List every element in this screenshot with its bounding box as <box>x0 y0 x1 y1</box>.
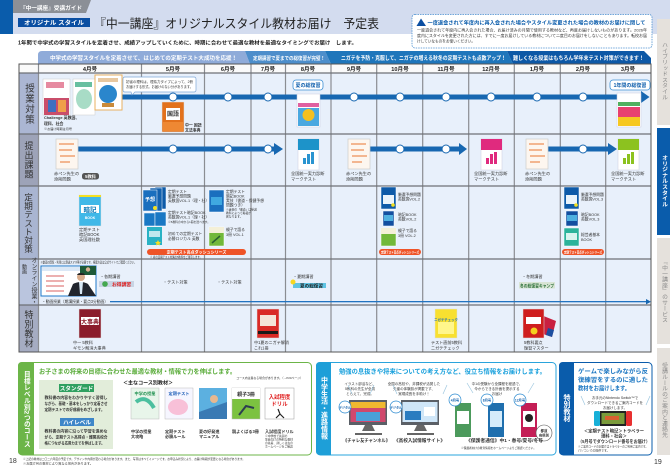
speech bubble <box>123 77 196 95</box>
June test books: 教科によって掲載が <box>226 211 251 215</box>
month headers <box>83 66 636 73</box>
red pen assignments: 赤ペン先生の <box>525 170 550 177</box>
notice box: 度内にスタイルを変更された方には、すでに一度お届けしている教材について二度目のお届けをしないこともあります。転校お届 <box>417 33 647 38</box>
red pen assignments: 添削問題 <box>525 176 543 182</box>
Oct test books <box>379 187 421 255</box>
book group: Challenge April: ※お届け時期は月号 <box>44 126 72 131</box>
special materials: ギモン解消大事典 <box>73 344 106 350</box>
Oct test books: 英数VOL.2 <box>398 216 416 222</box>
book group: Challenge April: Challenge 英数国、 <box>44 115 79 120</box>
month headers: 3月号 <box>621 66 636 73</box>
bubble: summer review <box>293 80 323 127</box>
panel: course levels: の先着、詳しくは左の <box>265 441 293 445</box>
phase banner <box>38 51 651 64</box>
row labels: 動画 <box>21 263 27 275</box>
panel: school life info: 8月号 <box>483 397 492 402</box>
month headers: 11月号 <box>437 66 455 73</box>
panel: course levels: ながら、基礎・基本をしっかり定着させ <box>44 401 108 406</box>
panel: course levels: 教科書の内容に沿って学習を進めな <box>44 428 108 434</box>
June test books <box>209 189 264 246</box>
panel: school life info: イラスト部活など、 <box>344 381 376 386</box>
panel: course levels: 格につながる応用力までを伸ばします。 <box>44 440 104 446</box>
June test books: 3冊 VOL.1 <box>226 233 244 237</box>
guide tab <box>13 0 91 13</box>
month headers: 4月号 <box>83 66 98 73</box>
January test books: 英数VOL.3 <box>581 216 599 222</box>
special materials: これ1冊 <box>254 344 269 350</box>
panel: course levels: 生徒向けの特別な教材 <box>265 438 293 442</box>
row labels: 特別教材 <box>24 309 34 348</box>
panel: course levels: 定期テストでの好成績をめざします。 <box>44 407 104 412</box>
May test books: 定期テスト高点ダッシュシリーズ <box>167 249 226 255</box>
panel: school life info: 中1の受験から全課程を経過で、 <box>472 381 522 386</box>
book: grammar dictionary <box>162 102 202 132</box>
online lessons: 夏の総復習 <box>300 282 323 290</box>
panel: special material: お手元のNintendo Switch™で <box>592 395 639 400</box>
panel: course levels: 親子3冊 <box>237 391 255 398</box>
June test books: 問題つき） <box>226 202 245 208</box>
speech bubble: 初省の理科は、理系力タイプによって、2冊 <box>126 79 193 84</box>
footnotes: ※お届け月の教材により異なる場合があります。 <box>23 460 93 466</box>
special materials: 5教科要点 <box>524 339 543 345</box>
June test books: 異なります。 <box>226 214 243 218</box>
June test books: ※美術の「書道」は受講 <box>226 208 257 212</box>
panel: course levels <box>18 362 312 455</box>
month headers: 12月号 <box>482 66 500 73</box>
book: grammar dictionary: 国語 <box>167 111 179 118</box>
May test books: 厳選予想問題 <box>168 194 191 198</box>
speech bubble: お届けする形式。お届けのない分があります。 <box>126 84 193 89</box>
Oct test books: 厳選予想問題 <box>398 192 421 197</box>
panel: school life info: とらえて、完成。 <box>346 391 374 396</box>
guide tab: 『中一講座』受講ガイド <box>20 4 82 12</box>
panel: school life info: デジタル <box>339 404 351 409</box>
January test books: BOOK <box>581 238 592 242</box>
panel: course levels: 夏の好発進 <box>199 428 219 434</box>
panel: school life info: お届け <box>492 391 503 396</box>
month headers: 7月号 <box>261 66 276 73</box>
footnotes: ※上記の教材は二〇二六年度の予定です。デザインや内容が変わる場合があります。また、写真はすべてイメージです。お申込み状況により、お届け時期が変更になる場合があります。 <box>23 456 245 461</box>
panel: special material: ダウンロードできるご案内コードを <box>587 400 643 405</box>
June test books: 暗記BOOK <box>226 194 245 198</box>
bubble: year review: 1年間の総復習 <box>614 82 646 89</box>
panel: special material: ゲームで楽しみながら反 <box>578 368 648 376</box>
month headers: 1月号 <box>530 66 545 73</box>
phase banner: 定期講習で夏までの総復習が完璧！ <box>253 55 325 62</box>
mock test books: マークテスト <box>474 176 499 182</box>
badge: original style: オリジナル スタイル <box>24 19 84 27</box>
panel: school life info: 実現成長を手助け！ <box>398 391 430 396</box>
Oct test books: 親子で語る <box>398 228 417 233</box>
book group: Challenge April <box>43 75 122 131</box>
special materials: 中一 5教科 <box>73 339 93 345</box>
panel: special material: パソコンでの提供です。 <box>578 448 610 452</box>
online lessons: お得講習 <box>112 281 131 288</box>
panel: school life info: 府県別 <box>539 432 550 438</box>
red pen assignments <box>54 139 550 182</box>
panel: special material: 教材をお届けします。 <box>578 384 630 392</box>
red pen assignments: 添削問題 <box>346 176 364 182</box>
panel: course levels: ※中学校で先週の <box>265 434 288 438</box>
online lessons: 冬の総復習キャンプ <box>520 282 554 290</box>
Oct test books: 定期テスト高点ダッシュシリーズ <box>381 250 420 254</box>
month headers: 10月号 <box>391 66 409 73</box>
panel: school life info: 《チャレ友チャンネル》 <box>343 437 390 444</box>
May test books: ※5教科の中から1冊を選べます。 <box>168 220 210 224</box>
schedule grid <box>19 64 651 352</box>
red pen assignments: 添削問題 <box>54 176 72 182</box>
panel: course levels: コース内は異なる場合があります。（→P20ページ） <box>236 375 303 380</box>
panel: course levels: がら、定期テスト高得点・難関高校合 <box>44 434 108 440</box>
panel: course levels: 定期テスト <box>165 428 185 434</box>
April test books <box>79 195 101 243</box>
panel: school life info: 勉強の息抜きや将来についての考え方など、役立ち情報をお届けします。 <box>339 366 546 376</box>
May test books: 予想 <box>145 196 155 203</box>
January test books: 厳選予想問題 <box>581 192 604 197</box>
red pen assignments: 5教科 <box>85 173 97 180</box>
online lessons: ・冬期講習 <box>522 273 542 279</box>
panel: course levels: ホームページをご確認 <box>265 444 293 448</box>
May test books: 定期テスト暗記BOOK <box>168 210 206 215</box>
panel: school life info: 4月号 <box>451 397 460 402</box>
book: grammar dictionary: 中一 国語 <box>185 122 202 128</box>
May test books: 必勝ロジカル 英数 <box>168 236 200 241</box>
panel: school life info: 《高校入試情報サイト》 <box>394 437 445 444</box>
footnotes <box>23 456 245 466</box>
panel: school life info: ※保護者向けの教育情報をホームページよりご確認ください。 <box>461 445 536 450</box>
April test books: 暗記 <box>84 205 97 214</box>
January test books: 総芸者基本 <box>581 232 600 237</box>
side tabs: ハイブリッドスタイル <box>660 42 667 100</box>
April test books: 英国理社数 <box>79 236 101 243</box>
online lessons: ・テスト対策 <box>217 278 242 284</box>
special materials: 大事典 <box>81 318 99 326</box>
notice box: けしていなものをお使いください。 <box>417 38 475 44</box>
online lessons: ・動画授業（期講授業・要点3分動画） <box>42 298 108 304</box>
panel: school life info: 全国の高校や、非課税が活発した <box>388 381 441 386</box>
mock test books: 全国統一実力診断 <box>611 170 645 177</box>
April test books: 暗記BOOK <box>79 231 100 238</box>
online lessons: ・各期講習 <box>100 273 120 279</box>
intro text: 1年間で中学式の学習スタイルを定着させ、成績アップしていくために、時期に合わせて最適な教材を最適なタイミングでお届け します。 <box>18 38 357 46</box>
phase banner: ニガテを予防・克服して、ニガテの増える秋冬の定期テストも点数アップ！ <box>341 54 506 62</box>
notice box <box>412 14 652 48</box>
Oct test books: 暗記BOOK <box>398 212 417 217</box>
special materials: ニガテチェック <box>431 344 460 350</box>
panel: special material: ※ご案内コードのお届けはトラベラーのご利用ご案内です。 <box>578 444 648 448</box>
red pen assignments: 赤ペン先生の <box>54 170 79 177</box>
special materials: 復習マスター <box>524 344 549 350</box>
panel: school life info: 12月号 <box>515 397 526 402</box>
January test books: 英数国VOL.3 <box>581 196 603 202</box>
April test books: 定期テスト <box>79 227 100 233</box>
online lessons: ※動画の閲覧・利用には別途スマホ等が必要です。視聴方法は公式サイトでご確認ください。 <box>40 260 136 265</box>
panel: special material: 特別教材 <box>563 393 570 423</box>
panel: course levels: 大攻略 <box>131 433 144 439</box>
panel: school life info: 今からできる計画を提示する <box>474 386 520 391</box>
side tabs: 『中一講座』のサービス <box>660 259 667 323</box>
special materials: テスト直前5教科 <box>431 339 462 345</box>
row labels: オンライン授業・ <box>30 257 37 305</box>
January test books <box>562 187 604 255</box>
month headers: 6月号 <box>221 66 236 73</box>
panel: special material: 理科・社会＞ <box>601 432 627 440</box>
June test books: 親子で語る <box>226 227 245 232</box>
month headers: 5月号 <box>166 66 181 73</box>
panel: course levels: お子さまの将来の目標に合わせた最適な教材・情報で力を伸ばします。 <box>39 366 236 376</box>
April test books: BOOK <box>85 216 96 220</box>
panel: school life info <box>316 362 556 455</box>
online lessons: ・テスト対策 <box>163 278 188 284</box>
panel: course levels: ＜主なコース別教材＞ <box>123 380 173 386</box>
panel: course levels: スタンダード <box>60 384 94 392</box>
row labels <box>21 82 37 348</box>
month headers: 2月号 <box>576 66 591 73</box>
panel: course levels: 入試程度ドリル <box>265 428 294 434</box>
row labels: 授業対策 <box>23 82 35 125</box>
May test books: 定期テスト <box>168 189 187 194</box>
month headers: 9月号 <box>347 66 362 73</box>
row labels: 提出課題 <box>24 141 34 179</box>
panel: course levels: 目標レベル別2つのコース <box>22 371 31 447</box>
mock test books: マークテスト <box>611 176 636 182</box>
panel: special material: （5月号でダウンロード番号をお届け） <box>578 438 650 445</box>
side tabs <box>657 19 670 455</box>
May test books: 英数国VOL.1（理・社） <box>168 198 209 203</box>
mock test books <box>291 139 645 182</box>
panel: special material: ＜定期テスト暗記＞トラベラー <box>584 428 644 434</box>
mock test books: 全国統一実力診断 <box>474 170 508 177</box>
panel: course levels: 親よくばる3冊 <box>232 428 259 434</box>
special materials: 中1夏のニガテ解消 <box>254 339 289 345</box>
timeline: assignments <box>78 143 617 155</box>
panel: course levels: 必勝ルール <box>165 433 185 439</box>
side tabs: 受講ルールのご案内と連絡先 <box>660 361 667 439</box>
row labels: 定期テスト対策 <box>24 192 34 254</box>
panel: course levels: 中学の授業 <box>135 390 156 397</box>
panel: course levels: 定期テスト <box>169 390 189 397</box>
red pen assignments: 赤ペン先生の <box>346 170 371 177</box>
badge: original style <box>18 18 90 27</box>
January test books: 暗記BOOK <box>581 212 600 217</box>
panel: school life info: 都道 <box>541 428 548 433</box>
notice box: 一度退会されて年度内に再入会された場合、お届け済みの月間で使用する教材など、再度お届けしないものがあります。2026年 <box>417 28 647 32</box>
panel: course levels: 教科書の内容をわかりやすく習得し <box>44 395 108 400</box>
May test books: 初めての定期テスト <box>168 231 202 236</box>
panel: special material <box>559 362 652 455</box>
side tabs: オリジナルスタイル <box>660 155 667 207</box>
mock test books: 全国統一実力診断 <box>291 170 325 177</box>
book group: Challenge April: 理科、社会 <box>44 121 64 126</box>
May test books: 英数国VOL.1（理・社） <box>168 214 209 220</box>
month headers: 8月号 <box>301 66 316 73</box>
panel: course levels: 中学の授業 <box>131 428 151 434</box>
panel: school life info: 5教科の先生が全員 <box>345 386 375 391</box>
June test books: 定期テスト <box>226 189 245 194</box>
page number left: 18 <box>9 458 17 465</box>
bubble: summer review: 夏の総復習 <box>295 82 321 89</box>
notice box: 一度退会されて年度内に再入会された場合やスタイル変更された場合の教材のお届けに関して <box>428 18 646 26</box>
timeline: lessons <box>122 91 650 103</box>
panel: special material: お届けします。 <box>603 405 627 410</box>
panel: course levels: ドリル <box>271 402 288 408</box>
panel: course levels: マニュアル <box>199 433 219 439</box>
panel: course levels: 入試程度 <box>269 393 291 401</box>
January test books: 定期テスト高点ダッシュシリーズ <box>564 250 603 254</box>
mock test books: マークテスト <box>291 176 316 182</box>
May test books: ※ 春の定期テスト対策の5教科をご用意します。 <box>150 254 202 259</box>
panel: special material: 復練習をするのに適した <box>578 376 648 384</box>
Oct test books: 3冊 VOL.2 <box>398 234 416 238</box>
May test books <box>143 187 246 259</box>
top header band <box>0 0 670 34</box>
book: grammar dictionary: 文法事典 <box>185 128 201 132</box>
panel: school life info: 先輩の体験談が掲載です、 <box>393 386 435 391</box>
title: 『中一講座』オリジナルスタイル教材お届け 予定表 <box>94 16 379 31</box>
phase banner: 難しくなる授業はもちろん学年末テスト対策ができます！ <box>513 54 644 62</box>
online lessons: ・夏期講習 <box>293 273 313 279</box>
panel: course levels: ハイレベル <box>63 420 91 426</box>
page number right: 19 <box>654 459 662 466</box>
June test books: 実技（書道・保健予想 <box>226 198 264 203</box>
Oct test books: 英数国VOL.2 <box>398 196 420 202</box>
bubble: year review <box>610 80 650 127</box>
special materials: ニガテチェック <box>434 317 458 322</box>
panel: school life info: 中学生活・進路情報 <box>320 376 328 441</box>
online lessons <box>40 260 651 304</box>
phase banner: 中学式の学習スタイルを定着させて、はじめての定期テスト大成功を応援！ <box>50 54 237 62</box>
panel: school life info: デジタル <box>390 404 402 409</box>
panel: school life info: 《保護者通信》中1・春号/夏号/冬号 <box>466 437 543 444</box>
special materials <box>73 309 556 350</box>
